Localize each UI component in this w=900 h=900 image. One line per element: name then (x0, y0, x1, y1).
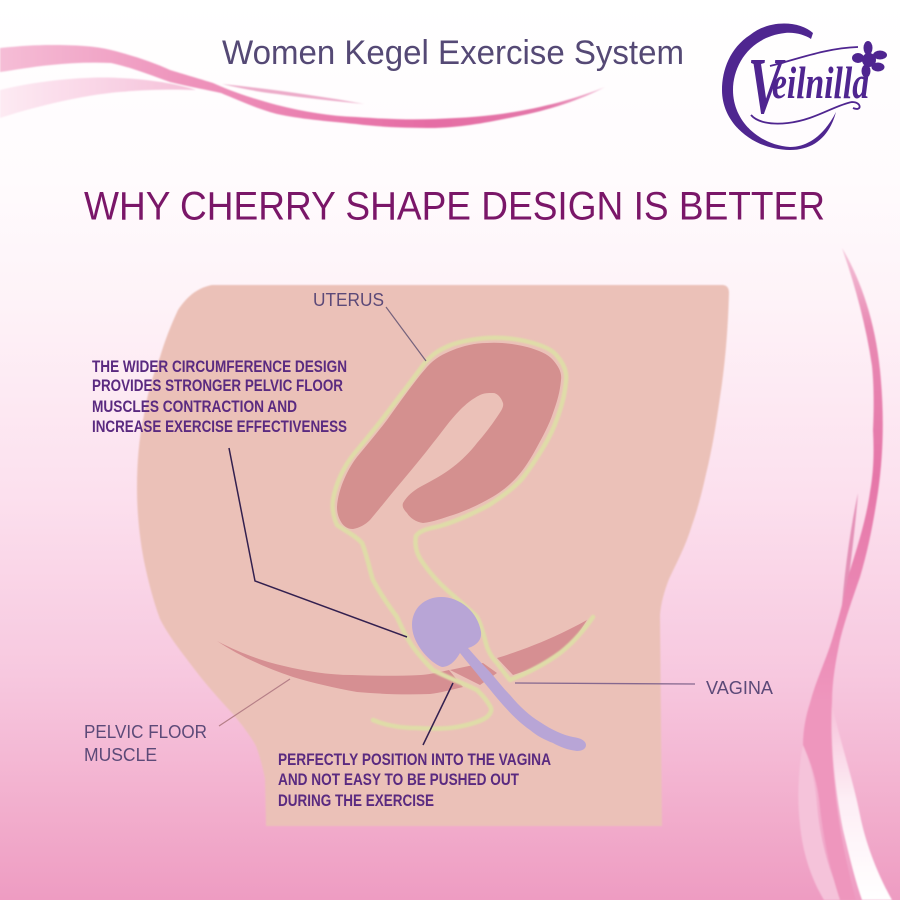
body silhouette (137, 285, 729, 826)
callout: wider circumference: INCREASE EXERCISE EFFECTIVENESS (92, 417, 347, 436)
leader line: vagina (515, 683, 695, 684)
callout: perfect position: DURING THE EXERCISE (278, 791, 434, 810)
vaginal and uterine outline (333, 338, 593, 729)
leader line: uterus (386, 307, 426, 361)
callout: perfect position (278, 750, 551, 810)
leader line: pelvic floor muscle (219, 679, 290, 726)
logo wordmark initial: V (748, 43, 786, 131)
logo flower (852, 41, 887, 78)
pelvic cross-section diagram (137, 285, 729, 826)
leader line: wider circumference (229, 448, 407, 637)
callout: wider circumference (92, 357, 347, 436)
callout: wider circumference: MUSCLES CONTRACTION AND (92, 397, 297, 416)
logo swashes (751, 47, 860, 124)
label: pelvic floor muscle (84, 722, 207, 765)
leader line: position (423, 683, 453, 745)
label: uterus: UTERUS (313, 290, 384, 310)
callout: wider circumference: PROVIDES STRONGER PELVIC FLOOR (92, 376, 343, 395)
callout: perfect position: PERFECTLY POSITION INTO THE VAGINA (278, 750, 551, 769)
callout: perfect position: AND NOT EASY TO BE PUSHED OUT (278, 770, 519, 789)
pelvic floor muscle (217, 620, 587, 694)
logo crescent (722, 24, 836, 150)
label: pelvic floor muscle: MUSCLE (84, 745, 157, 765)
header title: Women Kegel Exercise System (222, 34, 684, 72)
top pink swoosh (0, 45, 605, 128)
label: vagina: VAGINA (706, 678, 773, 698)
callout: wider circumference: THE WIDER CIRCUMFERENCE DESIGN (92, 357, 347, 376)
right pink swoosh (798, 248, 892, 900)
uterus muscle wall (337, 343, 561, 529)
main heading: WHY CHERRY SHAPE DESIGN IS BETTER (84, 184, 825, 228)
logo: Veilnilla (722, 24, 887, 150)
cherry kegel ball (412, 597, 586, 751)
label: pelvic floor muscle: PELVIC FLOOR (84, 722, 207, 742)
